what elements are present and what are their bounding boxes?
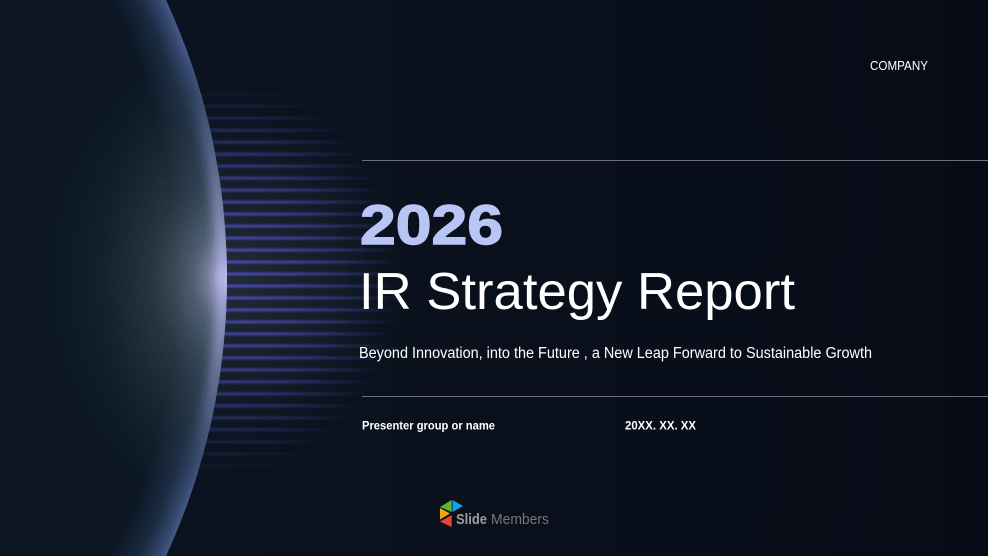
company label: COMPANY [870, 59, 929, 73]
planet with lit rim [50, 0, 227, 556]
logo: Slide Members [440, 500, 549, 528]
report title: IR Strategy Report [359, 263, 796, 321]
year heading: 2026 [360, 193, 503, 256]
subtitle: Beyond Innovation, into the Future , a New Leap Forward to Sustainable Growth [359, 345, 872, 362]
presenter: Presenter group or name [362, 418, 495, 432]
logo wordmark: Slide [456, 512, 487, 528]
lower divider [362, 396, 988, 397]
date: 20XX. XX. XX [625, 418, 696, 432]
top divider [362, 160, 988, 161]
logo wordmark: Members [491, 512, 549, 528]
light stripes beside planet [201, 93, 394, 466]
logo wordmark [456, 512, 549, 528]
icon: logo triangles [440, 500, 463, 527]
